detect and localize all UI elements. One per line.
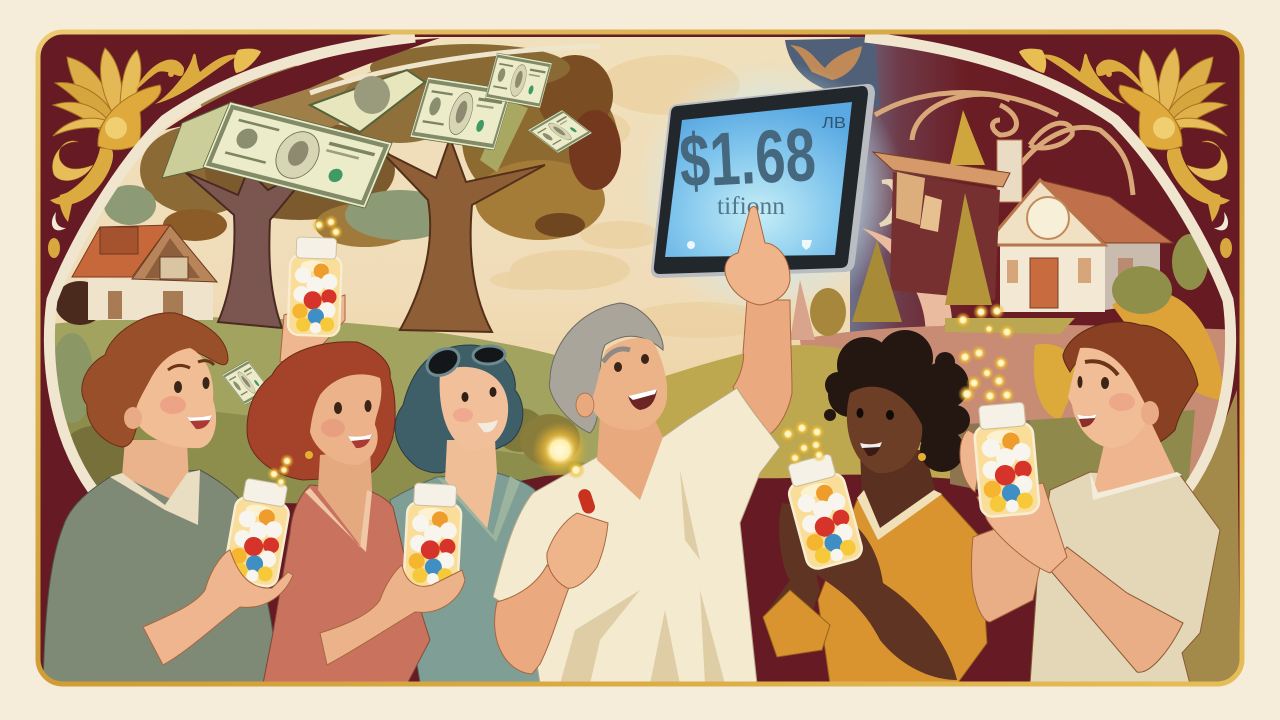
face xyxy=(440,367,508,450)
collar xyxy=(110,470,200,525)
dollar bills xyxy=(162,53,592,405)
body xyxy=(1030,472,1220,684)
pines xyxy=(790,110,992,340)
arch band xyxy=(49,37,1231,490)
neck xyxy=(445,440,497,530)
neck xyxy=(122,440,190,508)
hill shadow xyxy=(66,412,585,504)
jar person 2 xyxy=(403,483,463,588)
collar xyxy=(1090,472,1182,500)
hair xyxy=(247,342,395,480)
earring xyxy=(305,451,313,459)
left cottage xyxy=(72,225,217,320)
person 2 xyxy=(247,295,430,684)
jar person 5 xyxy=(781,452,864,571)
features xyxy=(603,349,657,410)
blue top leaves xyxy=(785,38,880,110)
ear xyxy=(124,407,142,429)
hair xyxy=(82,313,228,447)
bill large xyxy=(203,102,392,208)
person 3 xyxy=(390,343,550,682)
person 6 xyxy=(960,322,1220,684)
lower maroon backdrop xyxy=(284,474,980,510)
body xyxy=(493,388,780,684)
body xyxy=(263,485,430,684)
hand person 1 xyxy=(143,550,293,665)
right cottage xyxy=(985,140,1173,312)
swirls xyxy=(875,92,1133,195)
second thin arch band xyxy=(310,46,600,93)
face xyxy=(847,387,922,473)
tree canopy right xyxy=(340,44,621,240)
left trunk xyxy=(184,172,296,329)
right dusk panel xyxy=(850,37,1225,332)
maroon stripe xyxy=(165,38,440,130)
features xyxy=(321,400,372,448)
tablet side curl xyxy=(879,179,893,227)
left sleeve xyxy=(763,590,830,657)
sparkles xyxy=(267,215,1015,488)
face xyxy=(310,374,381,465)
tablet glyph: ЛB xyxy=(822,115,846,132)
ear xyxy=(576,393,594,417)
features xyxy=(856,408,894,456)
back arm xyxy=(972,520,1040,622)
corner ornament right xyxy=(1019,48,1232,258)
person 1 xyxy=(43,313,273,684)
tablet unit: tifionn xyxy=(717,193,786,220)
bill middle xyxy=(310,70,425,132)
red pill xyxy=(577,487,597,515)
right ground pink xyxy=(800,325,1226,477)
bill right xyxy=(410,77,512,150)
raised arm xyxy=(280,295,345,362)
neck xyxy=(1093,420,1177,493)
right trunk xyxy=(380,138,545,332)
ear xyxy=(1141,401,1159,425)
tablet screen xyxy=(665,102,852,257)
tablet icons xyxy=(687,240,812,250)
bill top xyxy=(485,53,552,108)
hand xyxy=(547,513,608,588)
lower right leaves xyxy=(1180,390,1240,682)
person 5 xyxy=(763,330,987,684)
tree canopy left xyxy=(104,65,415,247)
hair xyxy=(824,330,970,472)
neck xyxy=(860,450,935,535)
jar person 1 xyxy=(223,477,294,588)
back arm xyxy=(767,503,820,632)
earring xyxy=(918,453,926,461)
tablet bezel xyxy=(654,86,868,274)
collar xyxy=(305,488,372,552)
body xyxy=(818,493,987,684)
left foreground foliage xyxy=(50,281,580,485)
ground strip xyxy=(945,318,1075,334)
fingers xyxy=(960,430,985,492)
corner ornament left xyxy=(48,48,261,258)
jar raised xyxy=(288,237,342,336)
center hill xyxy=(656,345,950,479)
bill falling xyxy=(222,360,271,405)
hair xyxy=(395,345,523,473)
left hill xyxy=(54,317,600,463)
features xyxy=(1077,361,1135,427)
tablet xyxy=(651,84,875,278)
tablet halo xyxy=(646,68,900,310)
tablet amount: $1.68 xyxy=(677,112,818,203)
sweep path xyxy=(862,228,952,326)
scene xyxy=(54,37,1226,504)
hair xyxy=(549,303,663,433)
front arm xyxy=(1050,547,1183,672)
face xyxy=(590,338,667,430)
orange swirl leaf xyxy=(790,45,862,80)
collar xyxy=(437,476,520,542)
body xyxy=(43,470,273,684)
hair xyxy=(1063,322,1198,447)
broken cabin xyxy=(873,152,1010,300)
right foliage xyxy=(950,234,1225,500)
shirt folds xyxy=(560,470,725,684)
clouds xyxy=(490,55,770,338)
face xyxy=(135,348,216,448)
raised arm xyxy=(733,300,792,440)
features xyxy=(160,361,214,429)
bill small xyxy=(528,110,592,153)
tablet body xyxy=(651,84,875,278)
sky xyxy=(55,37,850,376)
hand person 2 xyxy=(320,565,465,665)
jar person 6 xyxy=(972,402,1040,517)
lower arm xyxy=(495,565,570,674)
face xyxy=(1068,348,1150,448)
front arm xyxy=(808,528,957,680)
neck xyxy=(318,450,372,545)
hand xyxy=(977,483,1067,573)
person 4 xyxy=(493,206,792,684)
collar xyxy=(857,490,942,540)
features xyxy=(453,387,498,432)
goggles xyxy=(426,344,506,377)
bill backing right xyxy=(480,100,528,172)
body xyxy=(390,473,550,682)
neck xyxy=(597,415,663,500)
bill back left xyxy=(162,102,232,178)
people xyxy=(43,206,1220,684)
raised hand xyxy=(725,206,790,305)
